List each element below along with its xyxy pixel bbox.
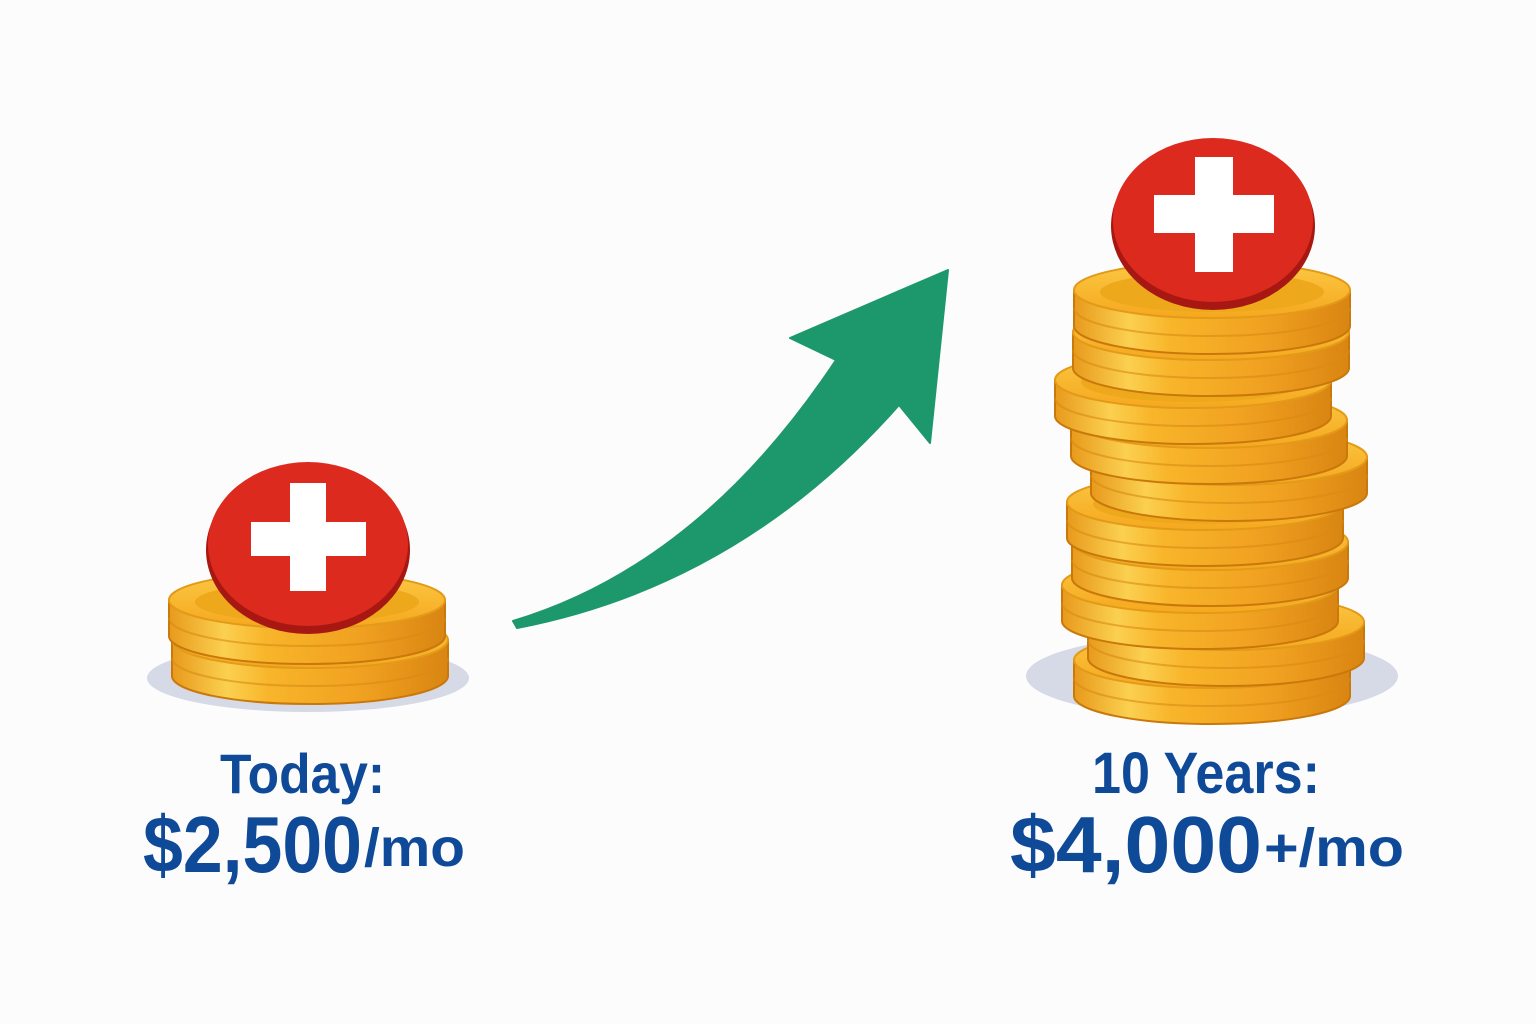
label: today (143, 742, 465, 889)
label: today: Today: (220, 742, 385, 805)
label: 10 years (1010, 741, 1404, 889)
icon: red cross badge large (1111, 138, 1315, 310)
label: 10 years: 10 Years: (1092, 741, 1320, 806)
large coin stack (1026, 138, 1398, 724)
label: 10 years: +/mo (1264, 818, 1404, 878)
small coin stack (147, 462, 469, 712)
icon: red cross badge small (206, 462, 410, 634)
label: 10 years: $4,000 (1010, 800, 1262, 889)
arrow: growth (513, 270, 948, 628)
label: today: $2,500 (143, 800, 362, 889)
label: today: /mo (364, 818, 465, 878)
